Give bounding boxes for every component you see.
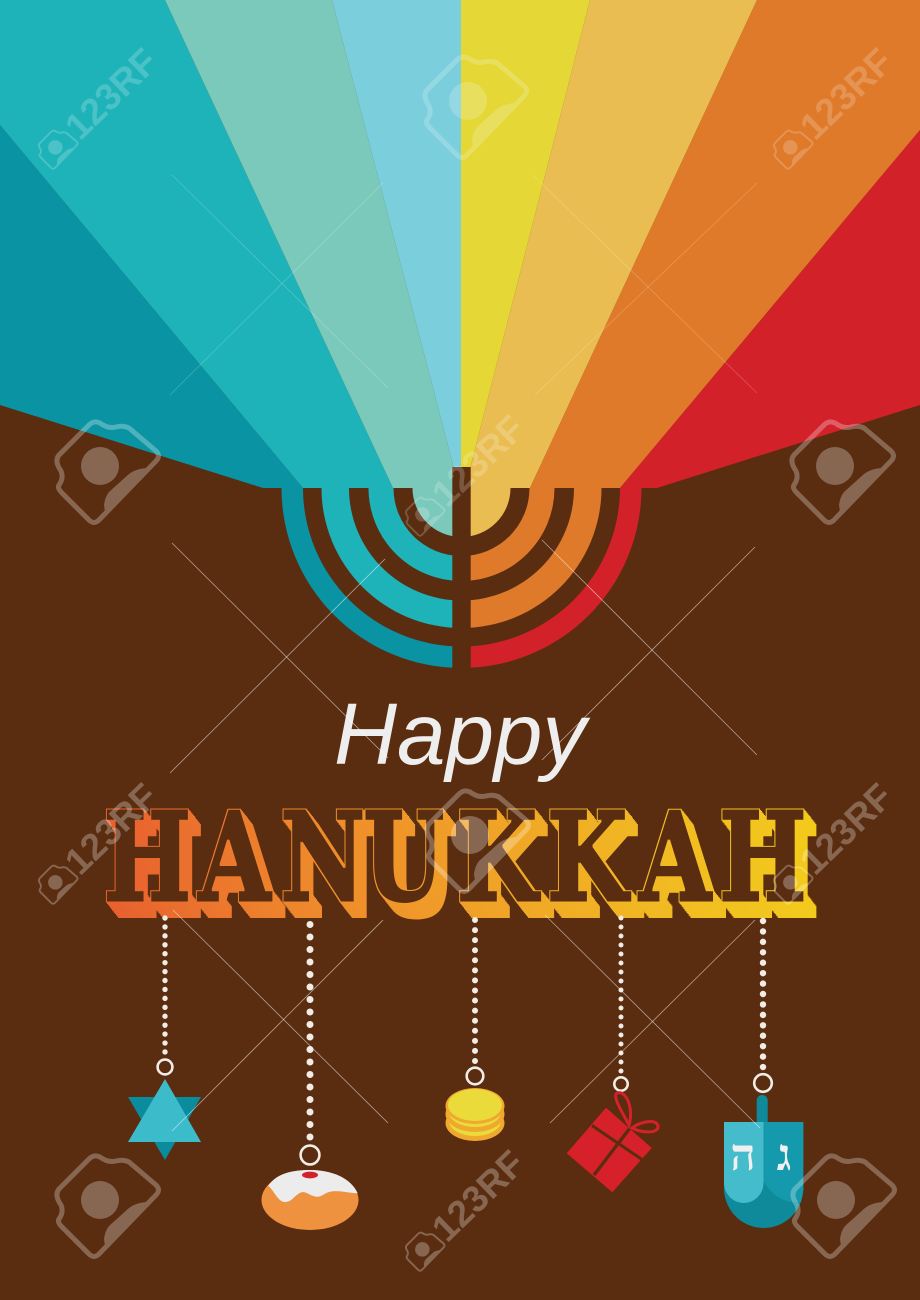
icon: sufganiyah doughnut bbox=[262, 1170, 358, 1230]
icon: gift box bbox=[567, 1093, 658, 1192]
crossing hairlines bbox=[170, 175, 760, 1131]
watermark stamps and 123RF logos: 123RF bbox=[57, 776, 166, 882]
watermark stamps and 123RF logos: 123RF bbox=[792, 776, 901, 882]
icon: gold coins bbox=[446, 1088, 504, 1141]
Happy script heading: Happy bbox=[334, 686, 591, 783]
watermark stamps and 123RF logos: 123RF bbox=[57, 41, 166, 147]
icon: star of david bbox=[128, 1079, 201, 1160]
rainbow rays bbox=[0, 0, 920, 488]
icon: dreidel: ה bbox=[730, 1131, 756, 1180]
bead strings bbox=[158, 918, 772, 1164]
icon: dreidel: ג bbox=[777, 1131, 791, 1180]
watermark stamps and 123RF logos: 123RF bbox=[424, 1143, 533, 1249]
watermark stamps and 123RF logos: 123RF bbox=[792, 41, 901, 147]
watermark stamps and 123RF logos: 123RF bbox=[424, 408, 533, 514]
menorah bbox=[282, 467, 642, 671]
icon: dreidel bbox=[724, 1095, 803, 1228]
HANUKKAH title: HANUKKAH bbox=[104, 785, 807, 929]
